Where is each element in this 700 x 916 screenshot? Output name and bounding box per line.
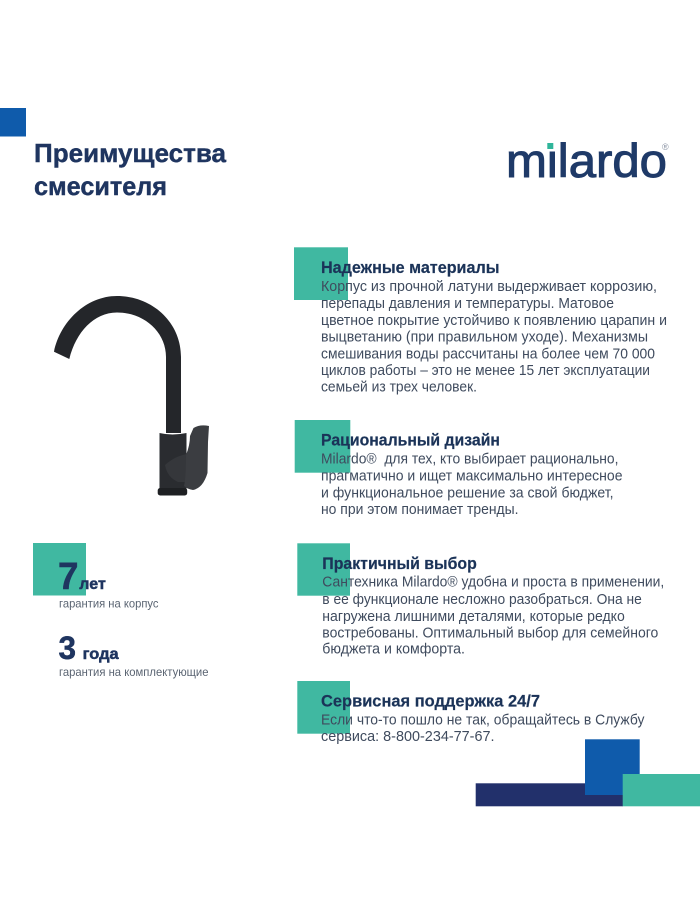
warranty 7 years: лет xyxy=(79,576,106,593)
text block xyxy=(321,450,622,518)
text block: цветное покрытие устойчиво к появлению царапин и xyxy=(321,312,667,329)
text block: и функциональное решение за свой бюджет, xyxy=(321,485,614,502)
panel: rational design xyxy=(295,420,622,518)
title: Преимущества xyxy=(34,138,227,168)
text block: Если что-то пошло не так, обращайтесь в Службу xyxy=(321,711,645,728)
text block: Сантехника Milardo® удобна и проста в применении, xyxy=(322,574,664,591)
heading: Сервисная поддержка 24/7 xyxy=(321,693,540,711)
accent: bottom right blocks xyxy=(476,739,700,806)
warranty 3 years: 3 xyxy=(58,630,76,666)
text block: востребованы. Оптимальный выбор для семейного xyxy=(322,624,658,641)
title: смесителя xyxy=(34,171,167,201)
teal square xyxy=(297,681,350,734)
text block xyxy=(321,278,667,396)
faucet base xyxy=(158,488,187,496)
warranty block xyxy=(33,543,209,679)
text block: бюджета и комфорта. xyxy=(322,641,465,658)
warranty 7 years: 7 xyxy=(58,556,78,598)
text block: Корпус из прочной латуни выдерживает коррозию, xyxy=(321,278,657,295)
warranty 3 years: года xyxy=(83,646,119,663)
text block xyxy=(322,574,664,658)
warranty 7 years xyxy=(58,556,158,610)
text block: прагматично и ищет максимально интересное xyxy=(321,468,622,485)
text block: Milardo® для тех, кто выбирает рационально, xyxy=(321,450,618,467)
text block: циклов работы – это не менее 15 лет эксплуатации xyxy=(321,362,650,379)
text block: перепады давления и температуры. Матовое xyxy=(321,295,614,312)
text block: выцветанию (при правильном уходе). Механизмы xyxy=(321,329,648,346)
text block: семьей из трех человек. xyxy=(321,379,477,396)
teal square xyxy=(295,420,350,473)
heading: Надежные материалы xyxy=(321,259,500,277)
panel: reliable materials xyxy=(294,247,667,396)
faucet lever xyxy=(184,425,209,490)
text block: но при этом понимает тренды. xyxy=(321,501,518,518)
text block: в ее функционале несложно разобраться. Она не xyxy=(322,591,642,608)
text block xyxy=(321,711,645,745)
warranty 3 years: гарантия на комплектующие xyxy=(59,665,209,679)
text block: нагружена лишними деталями, которые редко xyxy=(322,608,625,625)
logo: milardo: ® xyxy=(662,142,669,152)
faucet body xyxy=(160,433,186,490)
faucet spout xyxy=(54,296,181,433)
text block: сервиса: 8-800-234-77-67. xyxy=(321,728,494,745)
logo: milardo: milardo xyxy=(506,134,667,187)
teal square xyxy=(297,543,350,596)
heading: Практичный выбор xyxy=(322,555,477,573)
accent: blue square top left xyxy=(0,108,26,136)
teal square xyxy=(294,247,348,300)
heading: Рациональный дизайн xyxy=(321,432,500,450)
panel: service support xyxy=(297,681,645,745)
text block: смешивания воды рассчитаны на более чем 70 000 xyxy=(321,345,655,362)
title xyxy=(34,138,227,201)
panel: practical choice xyxy=(297,543,664,658)
faucet lever hub xyxy=(165,454,188,482)
icon: black kitchen faucet xyxy=(54,296,209,496)
warranty 3 years xyxy=(58,630,209,679)
warranty 7 years: гарантия на корпус xyxy=(59,596,158,610)
teal square xyxy=(33,543,86,596)
